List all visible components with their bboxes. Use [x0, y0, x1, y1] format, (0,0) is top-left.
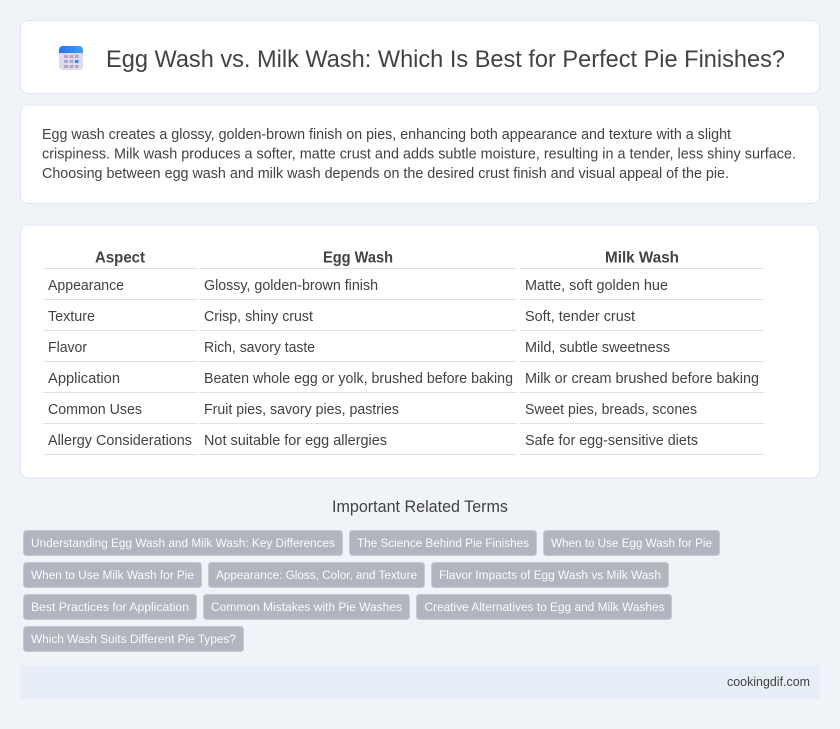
table row: flavor: [48, 340, 670, 356]
tag: The Science Behind Pie Finishes: [357, 536, 529, 550]
table row: application: Application: [48, 371, 120, 387]
tag: [24, 626, 244, 652]
table row: flavor: Rich, savory taste: [204, 340, 315, 356]
table row: appearance: Matte, soft golden hue: [525, 278, 668, 294]
title: Egg Wash vs. Milk Wash: Which Is Best for Perfect Pie Finishes?: [106, 46, 785, 73]
tag: [416, 594, 672, 620]
table header row: Milk Wash: [605, 250, 679, 266]
table row: appearance: Appearance: [48, 278, 124, 294]
table row: application: Milk or cream brushed before baking: [525, 371, 759, 387]
tag: When to Use Egg Wash for Pie: [551, 536, 712, 550]
table row: flavor: Flavor: [48, 340, 87, 356]
table row: common uses: Sweet pies, breads, scones: [525, 402, 697, 418]
table row: common uses: [48, 402, 697, 418]
tag: [350, 530, 536, 556]
table row: common uses: Common Uses: [48, 402, 142, 418]
table row: application: Beaten whole egg or yolk, brushed before baking: [204, 371, 513, 387]
panel: title header: [20, 20, 820, 94]
table row: allergy considerations: Not suitable for egg allergies: [204, 433, 387, 449]
tag: [24, 562, 202, 588]
text block: summary: Choosing between egg wash and milk wash depends on the desired crust finish and visual appeal of the pie.: [42, 166, 729, 182]
text block: summary: Egg wash creates a glossy, golden-brown finish on pies, enhancing both appearance and texture with a slight: [42, 127, 731, 143]
tag: [24, 594, 196, 620]
tag: Flavor Impacts of Egg Wash vs Milk Wash: [439, 568, 661, 582]
table header row: Egg Wash: [323, 250, 393, 266]
icon: calendar: [59, 46, 83, 70]
panel: summary paragraph: [20, 105, 820, 204]
tag: Which Wash Suits Different Pie Types?: [31, 632, 236, 646]
table row: texture: Soft, tender crust: [525, 309, 635, 325]
table row: allergy considerations: Allergy Considerations: [48, 433, 192, 449]
tag: When to Use Milk Wash for Pie: [31, 568, 194, 582]
table header row: [95, 250, 679, 266]
footer source text: cookingdif.com: [727, 675, 810, 689]
tag: Common Mistakes with Pie Washes: [211, 600, 402, 614]
table row: texture: Texture: [48, 309, 95, 325]
heading: important related terms: Important Related Terms: [332, 498, 508, 516]
table header row: Aspect: [95, 250, 146, 266]
tag: [544, 530, 720, 556]
tag: Appearance: Gloss, Color, and Texture: [216, 568, 417, 582]
table row: texture: Crisp, shiny crust: [204, 309, 313, 325]
tag: [24, 530, 342, 556]
table row: appearance: [48, 278, 668, 294]
tag: Understanding Egg Wash and Milk Wash: Key Differences: [31, 536, 335, 550]
text block: summary: [42, 127, 796, 182]
table row: flavor: Mild, subtle sweetness: [525, 340, 670, 356]
table row: allergy considerations: [48, 433, 698, 449]
table row: common uses: Fruit pies, savory pies, pastries: [204, 402, 399, 418]
table row: application: [48, 371, 759, 387]
tag: [432, 562, 668, 588]
tag: [208, 562, 424, 588]
tag: Creative Alternatives to Egg and Milk Washes: [424, 600, 664, 614]
tag list: related terms: [24, 530, 720, 652]
table row: texture: [48, 309, 635, 325]
tag: [204, 594, 410, 620]
table row: allergy considerations: Safe for egg-sensitive diets: [525, 433, 698, 449]
panel: comparison table: [20, 225, 820, 478]
text block: summary: crispiness. Milk wash produces a softer, matte crust and adds subtle moisture, resulting in a tender, less shiny surface.: [42, 146, 796, 162]
tag: Best Practices for Application: [31, 600, 189, 614]
footer: [20, 665, 820, 699]
table row: appearance: Glossy, golden-brown finish: [204, 278, 378, 294]
